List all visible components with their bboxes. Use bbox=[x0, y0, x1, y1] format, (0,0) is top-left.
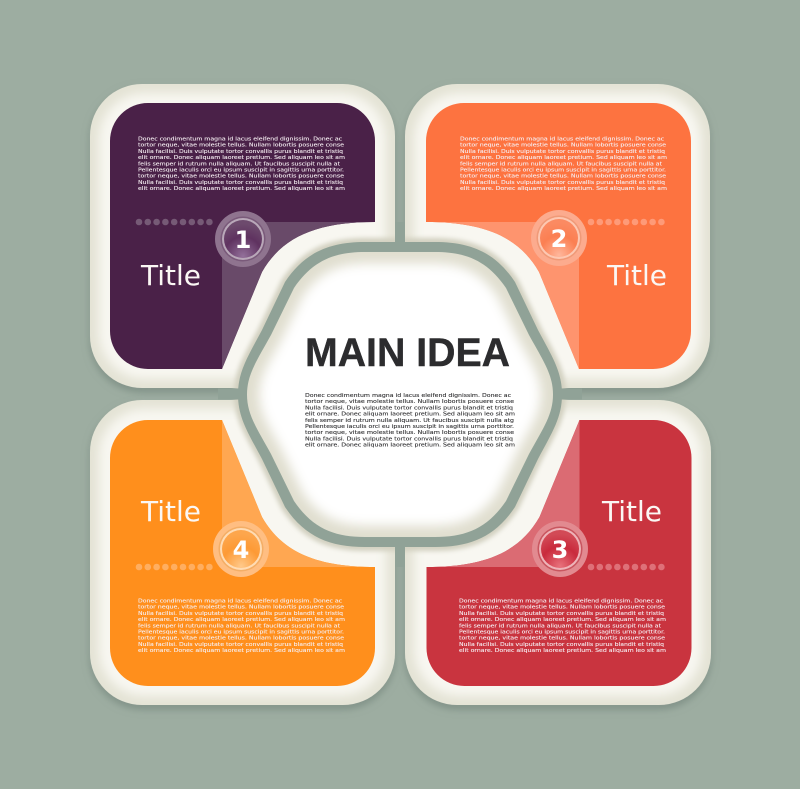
panel 3 text block bbox=[459, 598, 666, 654]
panel 3 frame bbox=[405, 400, 711, 705]
panel 1: purple bbox=[90, 84, 395, 388]
panel 3 text block: tortor neque, vitae molestie tellus. Nullam lobortis posuere conse bbox=[459, 636, 666, 642]
panel 3 text block: felis semper id rutrum nulla aliquam. Ut faucibus suscipit nulla at bbox=[459, 623, 662, 629]
panel 4 colour field bbox=[110, 420, 375, 686]
panel 4 text block: Donec condimentum magna id lacus eleifend dignissim. Donec ac bbox=[138, 598, 342, 604]
badge 2: 2 bbox=[551, 225, 567, 253]
panel 2: orange bbox=[405, 84, 710, 388]
panel 3 text block: Donec condimentum magna id lacus eleifend dignissim. Donec ac bbox=[459, 598, 663, 604]
panel 3 text block: elit ornare. Donec aliquam laoreet pretium. Sed aliquam leo sit am bbox=[459, 648, 666, 654]
panel 3 text block: tortor neque, vitae molestie tellus. Nullam lobortis posuere conse bbox=[459, 605, 666, 611]
panel 4 text block: Pellentesque iaculis orci eu ipsum suscipit in sagittis urna porttitor. bbox=[138, 630, 344, 636]
panel 2 text block: elit ornare. Donec aliquam laoreet pretium. Sed aliquam leo sit am bbox=[460, 155, 667, 161]
badge 1 bbox=[215, 211, 271, 267]
centre text block: Nulla facilisi. Duis vulputate tortor convallis purus blandit et tristiq bbox=[305, 405, 514, 411]
badge 3: 3 bbox=[552, 536, 568, 564]
panel 1 text block: Nulla facilisi. Duis vulputate tortor convallis purus blandit et tristiq bbox=[138, 180, 343, 186]
panel 4 text block bbox=[138, 598, 345, 654]
panel 1 title: Title bbox=[140, 260, 201, 292]
panel 3 text block: Pellentesque iaculis orci eu ipsum suscipit in sagittis urna porttitor. bbox=[459, 630, 665, 636]
centre text block: tortor neque, vitae molestie tellus. Nullam lobortis posuere conse bbox=[305, 399, 515, 405]
panel 1 colour field bbox=[110, 103, 375, 369]
panel 2 title: Title bbox=[606, 260, 667, 292]
main heading: MAIN IDEA bbox=[305, 331, 510, 375]
panel 1 dots bbox=[139, 219, 210, 225]
badge 4: 4 bbox=[233, 536, 249, 564]
panel 3 text block: Nulla facilisi. Duis vulputate tortor convallis purus blandit et tristiq bbox=[459, 611, 664, 617]
panel 1 text block bbox=[138, 136, 345, 192]
centre text block: tortor neque, vitae molestie tellus. Nullam lobortis posuere conse bbox=[305, 430, 515, 436]
panel 4 dots bbox=[139, 564, 210, 570]
centre hexagon ring bbox=[218, 222, 582, 567]
panel 1 text block: Donec condimentum magna id lacus eleifend dignissim. Donec ac bbox=[138, 136, 342, 142]
panel 4 frame bbox=[90, 400, 395, 705]
panel 3 dots bbox=[591, 564, 662, 570]
panel 4 text block: tortor neque, vitae molestie tellus. Nullam lobortis posuere conse bbox=[138, 605, 345, 611]
centre text block bbox=[305, 393, 515, 449]
panel 2 text block: Nulla facilisi. Duis vulputate tortor convallis purus blandit et tristiq bbox=[460, 180, 665, 186]
panel 3 text block: Nulla facilisi. Duis vulputate tortor convallis purus blandit et tristiq bbox=[459, 642, 664, 648]
panel 3: red bbox=[405, 400, 711, 705]
badge 1: 1 bbox=[235, 226, 251, 254]
panel 4 text block: tortor neque, vitae molestie tellus. Nullam lobortis posuere conse bbox=[138, 636, 345, 642]
panel 3 colour field bbox=[426, 420, 692, 686]
panel 3 title: Title bbox=[601, 496, 662, 528]
panel 2 colour field bbox=[426, 103, 691, 369]
panel 4 light wedge bbox=[222, 420, 375, 567]
panel 3 text block: elit ornare. Donec aliquam laoreet pretium. Sed aliquam leo sit am bbox=[459, 617, 666, 623]
centre text block: Donec condimentum magna id lacus eleifend dignissim. Donec ac bbox=[305, 393, 511, 399]
panel 4 text block: elit ornare. Donec aliquam laoreet pretium. Sed aliquam leo sit am bbox=[138, 648, 345, 654]
panel 4 text block: elit ornare. Donec aliquam laoreet pretium. Sed aliquam leo sit am bbox=[138, 617, 345, 623]
panel 2 text block: felis semper id rutrum nulla aliquam. Ut faucibus suscipit nulla at bbox=[460, 161, 663, 167]
panel 4 title: Title bbox=[140, 496, 201, 528]
badge 3 bbox=[532, 521, 588, 577]
panel 2 text block: Donec condimentum magna id lacus eleifend dignissim. Donec ac bbox=[460, 136, 664, 142]
badge 2 bbox=[531, 210, 587, 266]
panel 1 text block: elit ornare. Donec aliquam laoreet pretium. Sed aliquam leo sit am bbox=[138, 155, 345, 161]
panel 2 text block: elit ornare. Donec aliquam laoreet pretium. Sed aliquam leo sit am bbox=[460, 186, 667, 192]
panel 1 text block: felis semper id rutrum nulla aliquam. Ut faucibus suscipit nulla at bbox=[138, 161, 341, 167]
centre text block: Pellentesque iaculis orci eu ipsum suscipit in sagittis urna porttitor. bbox=[305, 424, 514, 430]
centre text block: elit ornare. Donec aliquam laoreet pretium. Sed aliquam leo sit am bbox=[305, 443, 515, 449]
panel 1 text block: Nulla facilisi. Duis vulputate tortor convallis purus blandit et tristiq bbox=[138, 149, 343, 155]
panel 3 light wedge bbox=[426, 420, 580, 567]
panel 1 frame bbox=[90, 84, 395, 388]
panel 1 text block: tortor neque, vitae molestie tellus. Nullam lobortis posuere conse bbox=[138, 143, 345, 149]
panel 2 text block: tortor neque, vitae molestie tellus. Nullam lobortis posuere conse bbox=[460, 174, 667, 180]
centre text block: elit ornare. Donec aliquam laoreet pretium. Sed aliquam leo sit am bbox=[305, 412, 515, 418]
panel 4 text block: felis semper id rutrum nulla aliquam. Ut faucibus suscipit nulla at bbox=[138, 623, 341, 629]
centre text block: felis semper id rutrum nulla aliquam. Ut faucibus suscipit nulla atg bbox=[305, 418, 514, 424]
panel 2 text block: tortor neque, vitae molestie tellus. Nullam lobortis posuere conse bbox=[460, 143, 667, 149]
panel 2 light wedge bbox=[426, 222, 579, 369]
panel 1 light wedge bbox=[222, 222, 375, 369]
panel 2 text block: Pellentesque iaculis orci eu ipsum suscipit in sagittis urna porttitor. bbox=[460, 168, 666, 174]
panel 1 text block: Pellentesque iaculis orci eu ipsum suscipit in sagittis urna porttitor. bbox=[138, 168, 344, 174]
badge 4 bbox=[213, 521, 269, 577]
panel 2 dots bbox=[591, 219, 662, 225]
panel 2 text block bbox=[460, 136, 667, 192]
panel 4 text block: Nulla facilisi. Duis vulputate tortor convallis purus blandit et tristiq bbox=[138, 642, 343, 648]
panel 4 text block: Nulla facilisi. Duis vulputate tortor convallis purus blandit et tristiq bbox=[138, 611, 343, 617]
centre hexagon bbox=[247, 252, 553, 537]
panel 1 text block: elit ornare. Donec aliquam laoreet pretium. Sed aliquam leo sit am bbox=[138, 186, 345, 192]
panel 4: amber bbox=[90, 400, 395, 705]
panel 1 text block: tortor neque, vitae molestie tellus. Nullam lobortis posuere conse bbox=[138, 174, 345, 180]
panel 2 text block: Nulla facilisi. Duis vulputate tortor convallis purus blandit et tristiq bbox=[460, 149, 665, 155]
panel 2 frame bbox=[405, 84, 710, 388]
centre text block: Nulla facilisi. Duis vulputate tortor convallis purus blandit et tristiq bbox=[305, 436, 514, 442]
